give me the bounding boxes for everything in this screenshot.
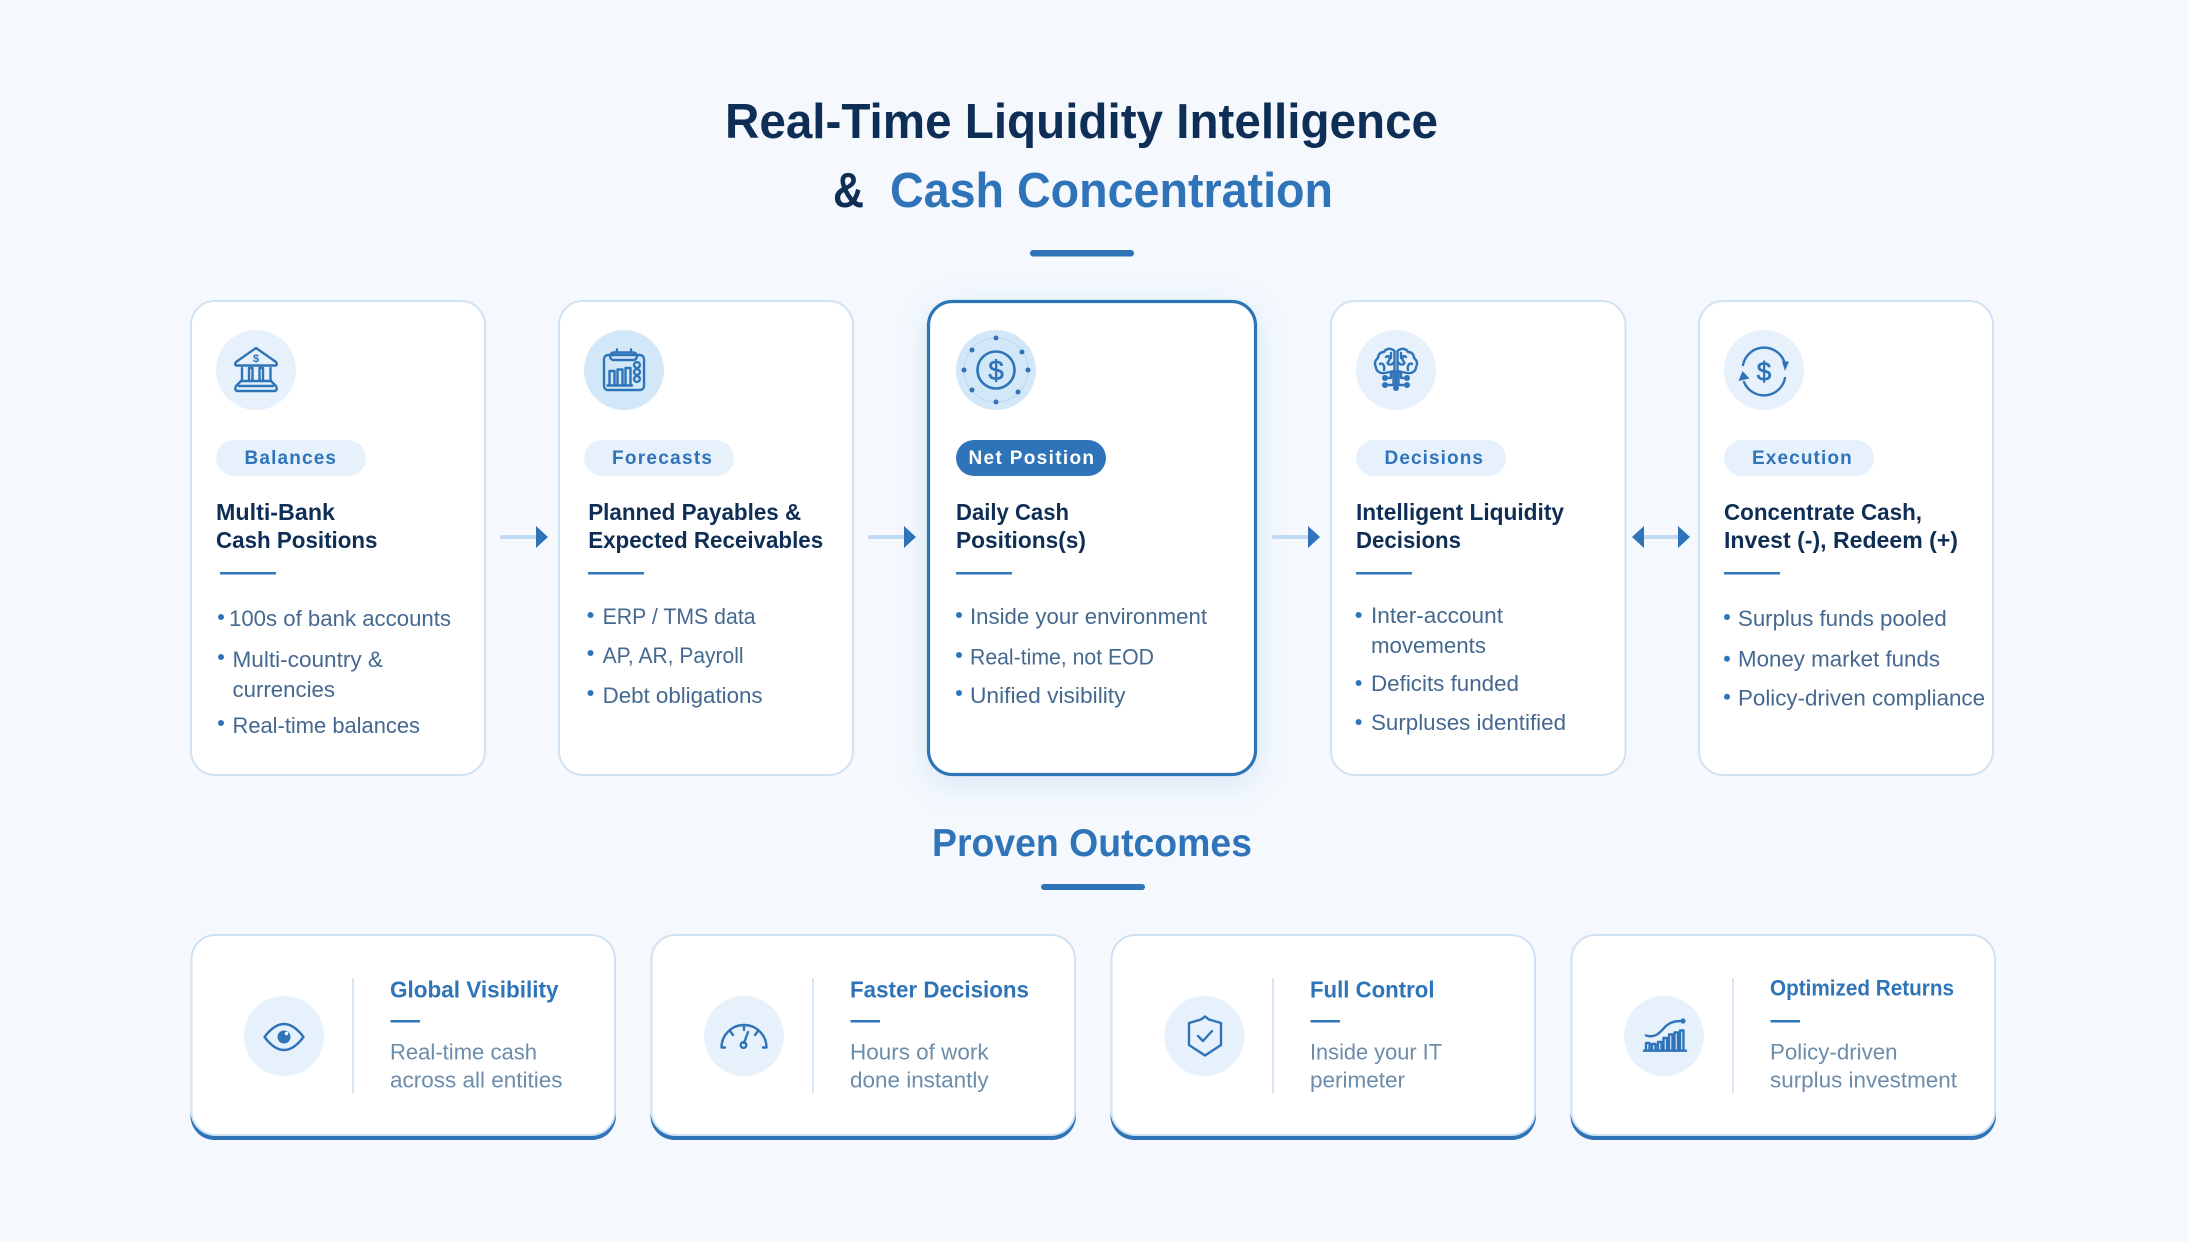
tag: Execution: [1724, 440, 1874, 476]
bullet list: 100s of bank accounts: [229, 606, 451, 631]
icon: dollar coin: [956, 330, 1036, 410]
panel: net position (highlighted): [928, 302, 1256, 774]
outcome text: surplus investment: [1770, 1068, 1957, 1093]
outcome card: faster decisions: [650, 935, 1076, 1140]
icon: growth chart: [1624, 996, 1704, 1076]
tag: Forecasts: [584, 440, 734, 476]
title: &: [833, 164, 864, 218]
icon: bank: $: [253, 353, 259, 365]
bullet list: Unified visibility: [970, 683, 1126, 708]
heading: proven outcomes: Proven Outcomes: [932, 822, 1252, 865]
tag: Net Position: Net Position: [968, 448, 1094, 469]
bullet list: Real-time balances: [232, 713, 420, 738]
icon: gauge: [704, 996, 784, 1076]
icon: shield check: [1164, 996, 1244, 1076]
card heading: [1724, 499, 1958, 553]
bullet list: Policy-driven compliance: [1738, 686, 1985, 711]
outcome text: Global Visibility: [390, 977, 558, 1003]
icon: dollar cycle: [1724, 330, 1804, 410]
outcome text: [1770, 976, 1957, 1093]
card heading: Daily Cash: [956, 499, 1069, 525]
outcome text: Real-time cash: [390, 1040, 537, 1064]
bullet list: [218, 606, 451, 738]
tag: Decisions: [1356, 440, 1506, 476]
card heading: Positions(s): [956, 527, 1086, 553]
bullet list: Real-time, not EOD: [970, 644, 1154, 670]
tag: Execution: Execution: [1752, 448, 1852, 469]
title: [725, 95, 1438, 256]
arrow: balances to forecasts: [500, 526, 548, 548]
bullet list: Multi-country &: [232, 647, 383, 672]
panel: forecasts: [559, 301, 853, 775]
card heading: Invest (-), Redeem (+): [1724, 527, 1958, 553]
bullet list: AP, AR, Payroll: [603, 643, 744, 668]
panel: decisions: [1331, 301, 1626, 775]
outcome text: done instantly: [850, 1068, 989, 1093]
outcome text: [850, 977, 1029, 1093]
outcome text: [390, 977, 562, 1093]
outcome text: Inside your IT: [1310, 1040, 1442, 1064]
panel: balances: [191, 301, 485, 775]
bullet list: Money market funds: [1738, 647, 1940, 672]
card heading: Intelligent Liquidity: [1356, 499, 1564, 525]
icon: calendar chart: [584, 330, 664, 410]
bullet list: [588, 604, 763, 708]
icon: bank: [216, 330, 296, 410]
bullet list: Deficits funded: [1371, 671, 1519, 696]
icon: dollar cycle: $: [1757, 356, 1772, 386]
card heading: Concentrate Cash,: [1724, 499, 1922, 525]
card heading: [956, 499, 1086, 553]
heading: proven outcomes: [932, 822, 1252, 890]
tag: Balances: Balances: [244, 448, 336, 469]
bullet list: ERP / TMS data: [603, 604, 756, 629]
outcome card: optimized returns: [1570, 935, 1996, 1140]
panel: execution: [1699, 301, 1993, 775]
card heading: [1356, 499, 1564, 553]
tag: Balances: [216, 440, 366, 476]
icon: brain circuit: [1356, 330, 1436, 410]
bullet list: Inter-account: [1371, 603, 1503, 628]
outcome text: Hours of work: [850, 1040, 990, 1064]
bullet list: [956, 604, 1207, 708]
outcome card: full control: [1110, 935, 1536, 1140]
title: Cash Concentration: [890, 164, 1333, 218]
card heading: Cash Positions: [216, 527, 378, 553]
outcome text: Full Control: [1310, 977, 1434, 1003]
card heading: Expected Receivables: [588, 527, 823, 553]
outcome card: global visibility: [190, 935, 616, 1140]
title: Real-Time Liquidity Intelligence: [725, 95, 1438, 149]
bullet list: movements: [1371, 633, 1486, 658]
card heading: Multi-Bank: [216, 499, 336, 525]
card heading: Planned Payables &: [588, 499, 801, 525]
arrow: net position to decisions: [1272, 526, 1320, 548]
bullet list: Inside your environment: [970, 604, 1207, 629]
arrow: decisions and execution two-way: [1632, 526, 1690, 548]
card heading: Decisions: [1356, 527, 1461, 553]
bullet list: Surpluses identified: [1371, 710, 1566, 735]
icon: eye: [244, 996, 324, 1076]
tag: Net Position: [956, 440, 1106, 476]
outcome text: Policy-driven: [1770, 1040, 1898, 1064]
bullet list: [1724, 606, 1985, 711]
outcome text: Faster Decisions: [850, 977, 1029, 1003]
bullet list: Surplus funds pooled: [1738, 606, 1947, 631]
card heading: [216, 499, 378, 553]
bullet list: Debt obligations: [603, 683, 763, 708]
tag: Forecasts: Forecasts: [612, 448, 712, 469]
bullet list: currencies: [232, 677, 335, 702]
outcome text: Optimized Returns: [1770, 976, 1954, 1001]
outcome text: across all entities: [390, 1068, 562, 1093]
outcome text: [1310, 977, 1442, 1093]
bullet list: [1356, 603, 1566, 735]
icon: dollar coin: $: [988, 355, 1004, 386]
arrow: forecasts to net position: [868, 526, 916, 548]
outcome text: perimeter: [1310, 1068, 1405, 1093]
tag: Decisions: Decisions: [1384, 448, 1483, 469]
card heading: [588, 499, 823, 553]
